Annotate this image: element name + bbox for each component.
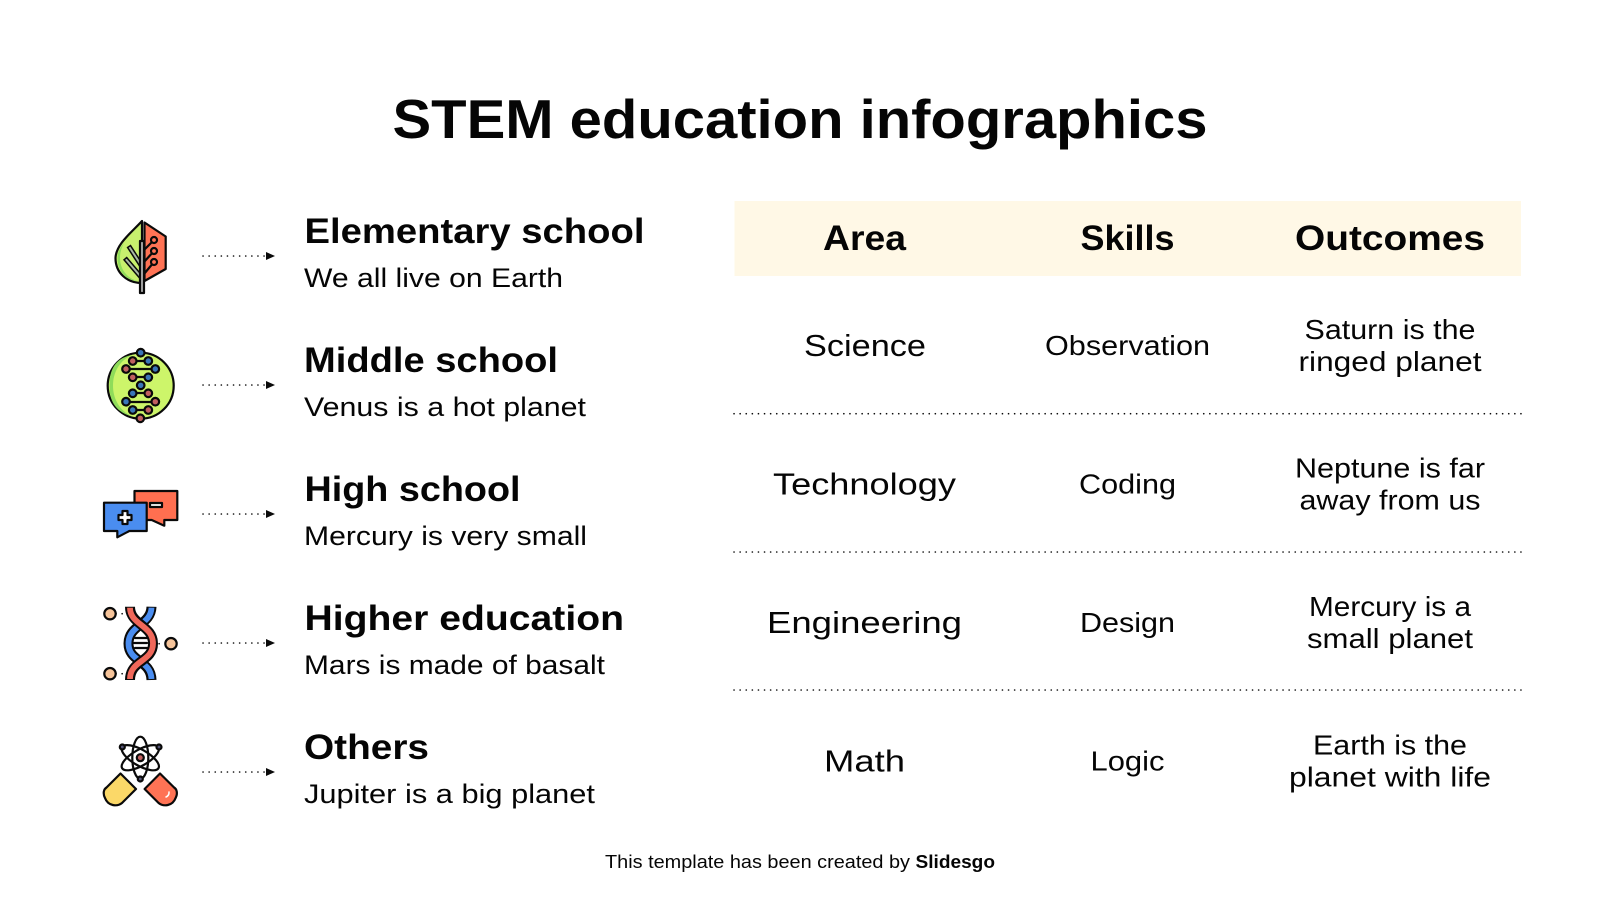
footer credit: Slidesgo <box>916 851 995 872</box>
table row: technology: Technology <box>773 466 957 502</box>
icon: dna in circle <box>108 349 174 422</box>
table row: science: Science <box>804 328 926 363</box>
text: higher education <box>304 599 624 680</box>
text: high school: Mercury is very small <box>304 521 587 551</box>
table row: science <box>804 314 1482 377</box>
table row: math: planet with life <box>1289 762 1491 792</box>
panel: school levels <box>104 212 644 809</box>
arrow: row 3 <box>203 510 275 518</box>
arrow: row 2 <box>203 381 275 389</box>
table header: Area <box>823 219 907 258</box>
text: higher education: Mars is made of basalt <box>304 650 606 680</box>
text: middle school <box>304 341 587 422</box>
text: higher education: Higher education <box>304 599 624 638</box>
icon: leaf circuit <box>116 221 166 293</box>
footer credit: This template has been created by <box>605 851 911 872</box>
table row: math: Logic <box>1090 746 1165 776</box>
arrow: row 5 <box>203 768 275 776</box>
table row: technology: Neptune is far <box>1295 452 1485 484</box>
table header: Skills <box>1080 219 1174 258</box>
table row: math <box>824 730 1491 792</box>
table row: math: Earth is the <box>1313 730 1467 760</box>
text: elementary school: We all live on Earth <box>304 263 563 293</box>
table row: engineering: Mercury is a <box>1309 591 1472 622</box>
text: others <box>304 728 596 809</box>
table header <box>734 201 1521 276</box>
table row: technology: away from us <box>1300 484 1480 516</box>
table row: science: ringed planet <box>1298 346 1482 377</box>
text: middle school: Venus is a hot planet <box>304 392 587 422</box>
text: high school: High school <box>304 470 520 509</box>
table row: math: Math <box>824 744 905 778</box>
table row: engineering: Engineering <box>767 605 962 640</box>
table row: engineering <box>767 591 1473 654</box>
text: others: Jupiter is a big planet <box>304 779 596 809</box>
text: elementary school: Elementary school <box>304 212 644 251</box>
text: middle school: Middle school <box>304 341 558 380</box>
icon: speech bubbles <box>104 491 177 537</box>
table row: science: Saturn is the <box>1304 314 1476 345</box>
panel: table <box>734 201 1523 792</box>
table row: engineering: Design <box>1080 607 1175 638</box>
text: others: Others <box>304 728 429 767</box>
arrow: row 4 <box>203 639 275 647</box>
table header: Outcomes <box>1295 219 1485 258</box>
text: elementary school <box>304 212 644 293</box>
icon: double helix <box>104 607 177 680</box>
table row: technology: Coding <box>1079 468 1176 500</box>
title: STEM education infographics <box>392 88 1208 150</box>
table row: technology <box>773 452 1485 516</box>
icon: atom and capsules <box>104 737 177 805</box>
arrow: row 1 <box>203 252 275 260</box>
text: high school <box>304 470 587 551</box>
table row: engineering: small planet <box>1307 623 1473 654</box>
table row: science: Observation <box>1045 330 1210 361</box>
